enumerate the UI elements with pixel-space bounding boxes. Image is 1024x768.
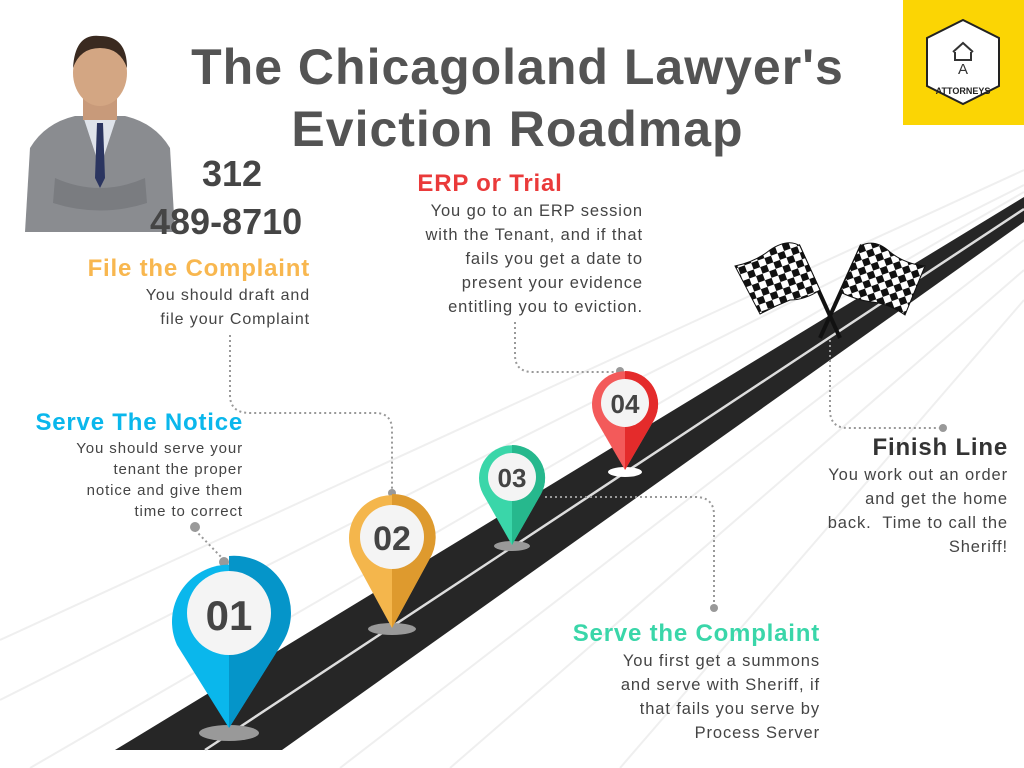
step: ERP or trial [417,170,643,316]
road [115,197,1024,750]
step: finish line: back. Time to call the [828,514,1008,532]
step: ERP or trial: fails you get a date to [465,250,643,268]
step: ERP or trial: entitling you to eviction. [448,298,643,316]
title [191,39,844,157]
step: serve the notice: tenant the proper [113,461,243,478]
step: serve the complaint: Process Server [695,724,820,742]
lawyer photo [25,36,174,232]
step: serve the complaint [573,620,820,742]
logo: A [958,61,968,78]
pin 03: 03 [498,463,526,493]
pin 03 [479,445,545,551]
step: ERP or trial: present your evidence [462,274,643,292]
step: serve the notice: notice and give them [87,482,243,499]
step: finish line: You work out an order [828,466,1008,484]
pin 01 [172,556,291,741]
step: ERP or trial: with the Tenant, and if that [425,226,643,244]
step: serve the notice: You should serve your [76,440,243,457]
step: serve the notice [35,409,243,520]
pin 02 [349,494,436,635]
step: file the complaint: file your Complaint [160,311,310,328]
logo [903,0,1024,125]
title: The Chicagoland Lawyer's [191,39,844,95]
step: finish line: Finish Line [873,434,1008,461]
step: finish line: and get the home [865,490,1008,508]
phone: 312 [202,153,262,194]
pin 04: 04 [611,389,640,419]
title: Eviction Roadmap [291,101,744,157]
step: serve the complaint: You first get a summons [623,652,820,670]
phone [150,153,302,242]
step: serve the notice: time to correct [134,503,243,520]
connector lines [195,322,940,607]
step: ERP or trial: ERP or Trial [417,170,563,197]
step: serve the complaint: that fails you serve by [640,700,820,718]
step: serve the complaint: and serve with Sheriff, if [621,676,820,694]
flags [735,243,925,338]
step: file the complaint: File the Complaint [88,255,310,282]
phone: 489-8710 [150,201,302,242]
step: file the complaint: You should draft and [146,287,310,304]
pin 04 [592,371,658,477]
pin 02: 02 [373,520,411,558]
logo: ATTORNEYS [936,86,990,96]
step: serve the complaint: Serve the Complaint [573,620,820,647]
step: ERP or trial: You go to an ERP session [431,202,643,220]
pin 01: 01 [206,592,252,639]
step: file the complaint [88,255,310,328]
step: finish line: Sheriff! [949,538,1008,556]
step: finish line [828,434,1008,556]
step: serve the notice: Serve The Notice [35,409,243,436]
